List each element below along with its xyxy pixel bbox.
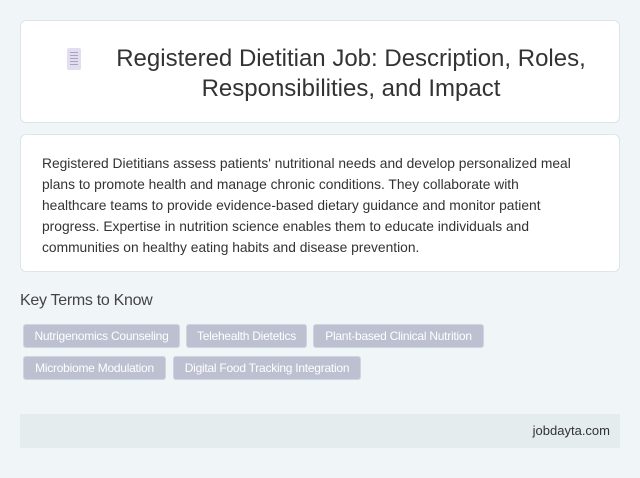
tag: Telehealth Dietetics xyxy=(197,329,296,343)
tag: Nutrigenomics Counseling xyxy=(34,329,169,343)
tag: Digital Food Tracking Integration xyxy=(185,361,349,375)
description card xyxy=(20,134,620,272)
tag xyxy=(173,356,361,380)
title: Registered Dietitian Job: Description, Roles, Responsibilities, and Impact xyxy=(116,45,586,102)
tag xyxy=(186,324,307,348)
tag: Plant-based Clinical Nutrition xyxy=(325,329,472,343)
footer xyxy=(20,414,620,448)
tag: Microbiome Modulation xyxy=(35,361,154,375)
title card xyxy=(20,20,620,123)
description text: Registered Dietitians assess patients' nutritional needs and develop personalized meal plans to promote health and manage chronic conditions. They collaborate with healthcare teams to provide evidence-based dietary guidance and monitor patient progress. Expertise in nutrition science enables them to educate individuals and communities on healthy eating habits and disease prevention. xyxy=(42,156,571,255)
tag xyxy=(313,324,484,348)
icon: document xyxy=(67,48,81,70)
footer text: jobdayta.com xyxy=(533,423,610,438)
heading: key terms: Key Terms to Know xyxy=(20,292,152,309)
tag xyxy=(23,324,180,348)
tag xyxy=(23,356,166,380)
